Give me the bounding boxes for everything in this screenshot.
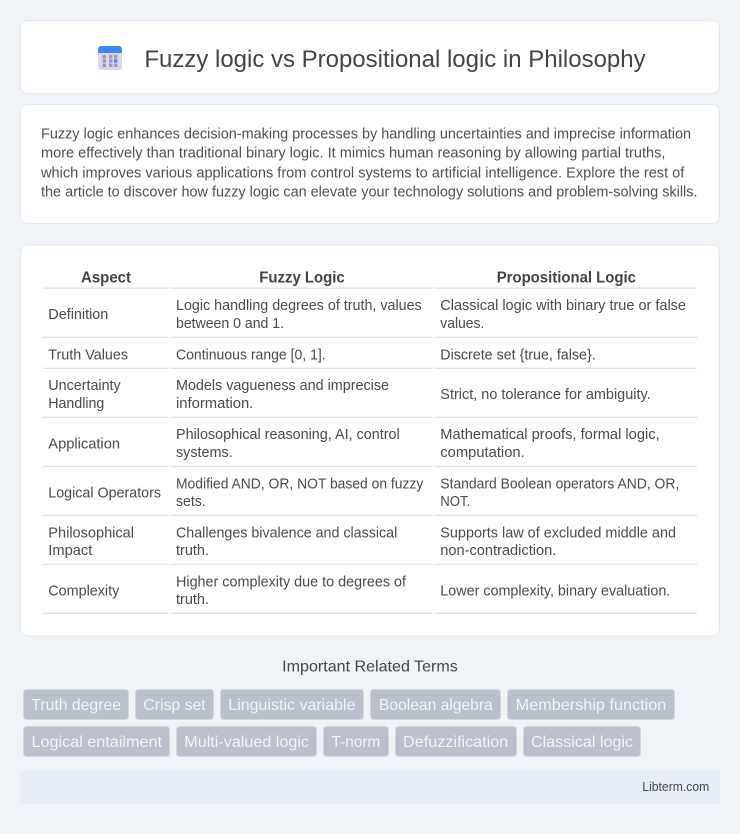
table row: Application: Mathematical proofs, formal logic,	[440, 427, 660, 443]
title: Fuzzy logic vs Propositional logic in Philosophy	[144, 46, 646, 73]
table row: Application: systems.	[176, 445, 233, 461]
tag: Crisp set: Crisp set	[143, 697, 206, 714]
tag: Logical entailment	[24, 726, 170, 756]
panel: title header	[20, 20, 720, 94]
panel: comparison table	[20, 245, 720, 636]
table row: Logical Operators: Modified AND, OR, NOT based on fuzzy	[176, 476, 424, 492]
table row: Truth Values: Truth Values	[48, 347, 128, 363]
table row: Philosophical Impact	[43, 525, 697, 565]
table row: Definition: Definition	[48, 307, 108, 323]
table row: Logical Operators	[43, 476, 697, 516]
tag: Multi-valued logic	[176, 726, 316, 756]
tag: Linguistic variable	[220, 690, 364, 720]
panel: introduction	[20, 104, 720, 224]
text block: intro paragraph: the article to discover how fuzzy logic can elevate your technology solutions and problem-solving skills.	[41, 185, 698, 201]
tag: T-norm: T-norm	[332, 734, 380, 751]
table header row: Fuzzy Logic	[259, 270, 345, 287]
table row: Philosophical Impact: Supports law of excluded middle and	[440, 525, 676, 541]
text block: intro paragraph: which improves various applications from control systems to artificial intelligence. Explore the rest of	[40, 165, 685, 181]
table row: Philosophical Impact: non-contradiction.	[440, 543, 556, 559]
tag: Multi-valued logic: Multi-valued logic	[184, 734, 309, 751]
tag: Defuzzification	[396, 726, 516, 756]
table row: Truth Values: Continuous range [0, 1].	[176, 347, 326, 363]
tag: Membership function	[508, 690, 674, 720]
tag: T-norm	[324, 726, 388, 756]
table row: Philosophical Impact: truth.	[176, 543, 209, 559]
table row: Philosophical Impact: Challenges bivalence and classical	[176, 525, 397, 541]
text block: intro paragraph: more effectively than traditional binary logic. It mimics human reasoning by allowing partial truths,	[41, 146, 665, 162]
tag: Linguistic variable: Linguistic variable	[228, 697, 356, 714]
table row: Application: Application	[48, 436, 120, 452]
tag: Truth degree	[24, 690, 128, 720]
text block: intro paragraph	[40, 126, 697, 201]
tag: Classical logic	[524, 726, 640, 756]
footer	[20, 770, 720, 804]
table row: Logical Operators: Standard Boolean operators AND, OR,	[440, 476, 679, 492]
icon: calendar grid	[98, 46, 122, 70]
table row: Philosophical Impact: Philosophical	[48, 525, 134, 541]
table row: Truth Values	[43, 347, 697, 369]
table row: Definition: between 0 and 1.	[176, 316, 284, 332]
table header row: Propositional Logic	[497, 270, 636, 287]
table row: Complexity	[43, 574, 697, 614]
table row: Application: computation.	[440, 445, 525, 461]
table header row: Aspect	[81, 270, 132, 287]
table row: Definition: values.	[440, 316, 484, 332]
table row: Uncertainty Handling: information.	[176, 396, 253, 412]
tag: Defuzzification: Defuzzification	[403, 734, 508, 751]
table row: Uncertainty Handling: Models vagueness and imprecise	[176, 378, 389, 394]
table row: Complexity: Complexity	[48, 583, 120, 599]
text block: intro paragraph: Fuzzy logic enhances decision-making processes by handling uncertainties and imprecise information	[41, 126, 691, 142]
table row: Logical Operators: Logical Operators	[48, 485, 161, 501]
table row: Truth Values: Discrete set {true, false}.	[440, 347, 596, 363]
tag: Boolean algebra	[370, 690, 500, 720]
tag: Classical logic: Classical logic	[531, 734, 633, 751]
tag: Logical entailment: Logical entailment	[32, 734, 163, 751]
tag: Crisp set	[136, 690, 214, 720]
table row: Definition: Logic handling degrees of truth, values	[176, 298, 422, 314]
footer credit: Libterm.com	[642, 779, 709, 794]
tag: Membership function: Membership function	[516, 697, 666, 714]
table row: Logical Operators: NOT.	[440, 494, 470, 510]
table row: Philosophical Impact: Impact	[48, 543, 92, 559]
table row: Uncertainty Handling: Strict, no tolerance for ambiguity.	[440, 387, 651, 403]
table row: Uncertainty Handling	[43, 378, 697, 418]
table row: Uncertainty Handling: Uncertainty	[48, 378, 121, 394]
heading: important related terms: Important Related Terms	[282, 659, 458, 676]
table row: Complexity: Higher complexity due to degrees of	[176, 574, 407, 590]
table header row	[43, 270, 697, 289]
table row: Complexity: truth.	[176, 592, 209, 608]
table row: Definition: Classical logic with binary true or false	[440, 298, 686, 314]
table row: Complexity: Lower complexity, binary evaluation.	[440, 583, 670, 599]
tag: Truth degree: Truth degree	[31, 697, 121, 714]
tag list: related terms	[24, 690, 674, 756]
table row: Application: Philosophical reasoning, AI, control	[176, 427, 400, 443]
table row: Application	[43, 427, 697, 467]
table row: Definition	[43, 298, 697, 338]
table row: Uncertainty Handling: Handling	[48, 396, 104, 412]
tag: Boolean algebra: Boolean algebra	[379, 697, 493, 714]
table row: Logical Operators: sets.	[176, 494, 206, 510]
